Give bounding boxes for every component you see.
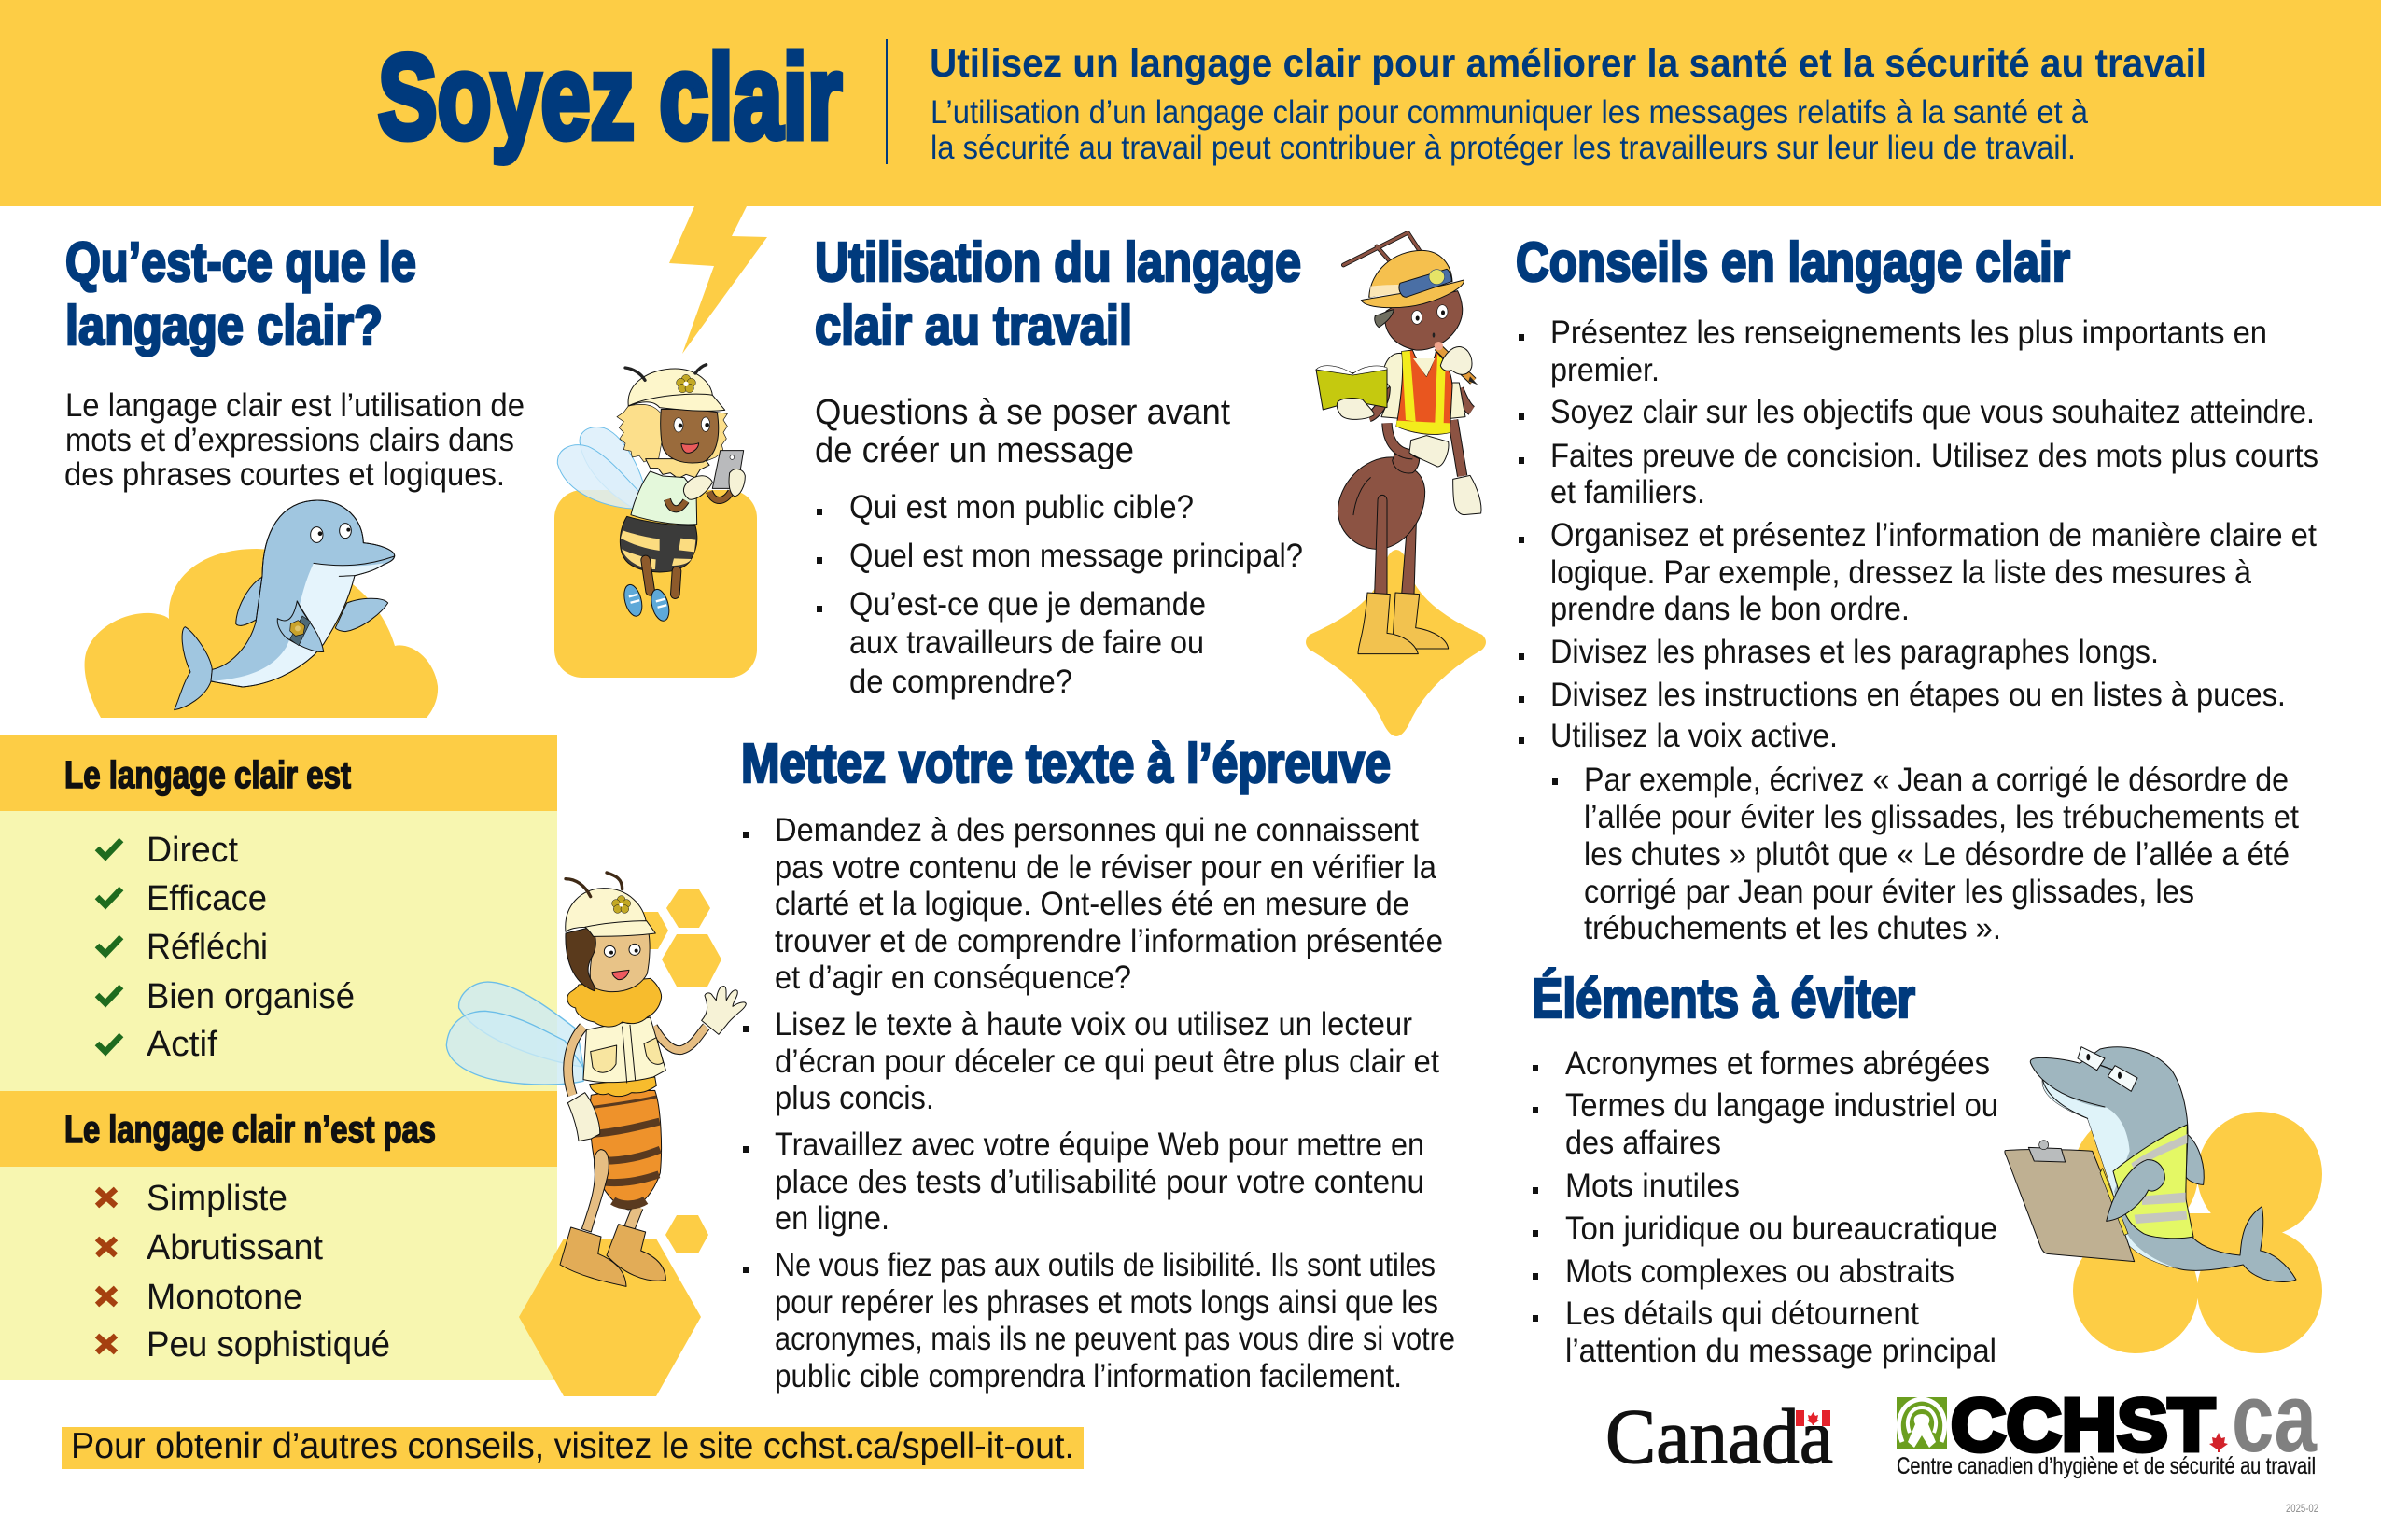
tips bullet list: Soyez clair sur les objectifs que vous souhaitez atteindre.	[1550, 394, 2315, 430]
questions intro	[815, 393, 1230, 470]
tips bullet list: prendre dans le bon ordre.	[1550, 591, 1910, 627]
avoid bullet list	[1533, 1045, 1998, 1369]
definition text: Le langage clair est l’utilisation de	[65, 387, 525, 424]
heading: tips: Conseils en langage clair	[1516, 231, 2070, 293]
avoid bullet list: Ton juridique ou bureaucratique	[1565, 1211, 1997, 1247]
panel: elements to avoid	[1532, 968, 1998, 1369]
testing bullet list: d’écran pour déceler ce qui peut être plus clair et	[775, 1043, 1439, 1080]
banner: plain language is: Le langage clair est	[64, 753, 351, 796]
tips bullet list	[1519, 315, 2318, 946]
logo: CCHST.ca	[1897, 1364, 2318, 1479]
testing bullet list: Ne vous fiez pas aux outils de lisibilité. Ils sont utiles	[775, 1247, 1436, 1283]
banner: plain language is not	[0, 1091, 557, 1167]
testing bullet list: pas votre contenu de le réviser pour en vérifier la	[775, 849, 1436, 886]
tips bullet list: trébuchements et les chutes ».	[1584, 910, 2001, 946]
avoid bullet list: Mots complexes ou abstraits	[1565, 1253, 1954, 1290]
tips bullet list: Divisez les instructions en étapes ou en listes à puces.	[1550, 677, 2286, 713]
header description: la sécurité au travail peut contribuer à protéger les travailleurs sur leur lieu de travail.	[931, 130, 2076, 166]
testing bullet list: Lisez le texte à haute voix ou utilisez un lecteur	[775, 1006, 1412, 1043]
yellow cloud	[85, 549, 438, 718]
avoid bullet list: Termes du langage industriel ou	[1565, 1087, 1998, 1124]
header description: L’utilisation d’un langage clair pour communiquer les messages relatifs à la santé et à	[931, 94, 2088, 131]
list: negative qualities	[0, 1167, 557, 1380]
yellow star	[1306, 550, 1486, 736]
panel: plain language is / is not	[0, 735, 557, 1380]
header banner	[0, 0, 2381, 206]
panel: what is plain language	[64, 231, 525, 493]
testing bullet list: pour repérer les phrases et mots longs ainsi que les	[775, 1284, 1438, 1321]
date code: 2025-02	[2286, 1502, 2318, 1515]
banner: plain language is not: Le langage clair n’est pas	[64, 1108, 436, 1151]
testing bullet list: et d’agir en conséquence?	[775, 959, 1131, 996]
question bullet list: Quel est mon message principal?	[849, 538, 1303, 574]
testing bullet list	[743, 812, 1455, 1394]
avoid bullet list: Les détails qui détournent	[1565, 1295, 1919, 1332]
testing bullet list: Demandez à des personnes qui ne connaissent	[775, 812, 1419, 848]
heading: what is plain language: Qu’est-ce que le	[65, 231, 416, 293]
logo: Canada wordmark: Canada	[1605, 1393, 1833, 1480]
panel: plain language tips	[1516, 231, 2318, 946]
tips bullet list: Divisez les phrases et les paragraphes longs.	[1550, 634, 2159, 670]
tips bullet list: Par exemple, écrivez « Jean a corrigé le désordre de	[1584, 762, 2289, 798]
tips bullet list: et familiers.	[1550, 474, 1705, 511]
testing bullet list: plus concis.	[775, 1080, 934, 1116]
callout: more tips link: Pour obtenir d’autres conseils, visitez le site cchst.ca/spell-it-out.	[71, 1426, 1074, 1466]
definition text	[64, 387, 525, 493]
question bullet list: Qui est mon public cible?	[849, 489, 1194, 525]
testing bullet list: trouver et de comprendre l’information présentée	[775, 923, 1443, 959]
header subtitle: Utilisez un langage clair pour améliorer la santé et la sécurité au travail	[930, 41, 2206, 86]
testing bullet list: place des tests d’utilisabilité pour votre contenu	[775, 1164, 1424, 1200]
heading: workplace use: clair au travail	[815, 295, 1132, 357]
list: positive qualities: Réfléchi	[147, 928, 268, 967]
avoid bullet list: Mots inutiles	[1565, 1168, 1740, 1204]
yellow clover	[2073, 1112, 2322, 1353]
yellow rounded box	[554, 490, 757, 678]
title: Soyez clair	[378, 31, 842, 164]
tips bullet list: les chutes » plutôt que « Le désordre de l’allée a été	[1584, 836, 2290, 873]
list: positive qualities: Efficace	[147, 879, 267, 918]
heading: workplace use	[815, 231, 1301, 357]
banner: plain language is	[0, 735, 557, 811]
tips bullet list: Utilisez la voix active.	[1550, 718, 1838, 754]
list: negative qualities: Monotone	[147, 1278, 302, 1317]
testing bullet list: Travaillez avec votre équipe Web pour mettre en	[775, 1127, 1424, 1163]
tips bullet list: Présentez les renseignements les plus importants en	[1550, 315, 2267, 351]
illustration: bee waving on hexagons	[446, 873, 746, 1396]
heading: test your text: Mettez votre texte à l’épreuve	[741, 733, 1391, 794]
yellow hexagons	[519, 889, 721, 1396]
testing bullet list: clarté et la logique. Ont-elles été en mesure de	[775, 886, 1409, 922]
list: negative qualities: Abrutissant	[147, 1228, 323, 1267]
illustration: ant worker with book on yellow star	[1306, 232, 1486, 736]
list: positive qualities	[0, 811, 557, 1091]
logo: CCHST.ca: ca	[2232, 1364, 2318, 1473]
header description	[931, 94, 2088, 166]
heading: workplace use: Utilisation du langage	[815, 231, 1301, 293]
heading: what is plain language	[65, 231, 416, 357]
question bullet list	[817, 489, 1303, 700]
testing bullet list: en ligne.	[775, 1200, 889, 1237]
questions intro: de créer un message	[815, 431, 1134, 470]
list: positive qualities: Bien organisé	[147, 977, 355, 1016]
list: positive qualities: Direct	[147, 831, 238, 870]
header divider	[886, 39, 888, 164]
question bullet list: Qu’est-ce que je demande	[849, 586, 1206, 623]
tips bullet list: Faites preuve de concision. Utilisez des mots plus courts	[1550, 438, 2318, 474]
avoid bullet list: l’attention du message principal	[1565, 1333, 1996, 1369]
definition text: mots et d’expressions clairs dans	[65, 422, 514, 458]
panel: use of plain language at work	[815, 231, 1303, 700]
icon: lightning bolt	[669, 206, 767, 354]
illustration: dolphin on yellow cloud	[85, 500, 438, 718]
avoid bullet list: Acronymes et formes abrégées	[1565, 1045, 1990, 1082]
avoid bullet list: des affaires	[1565, 1125, 1721, 1161]
tips bullet list: corrigé par Jean pour éviter les glissades, les	[1584, 874, 2194, 910]
illustration: dolphin with clipboard on yellow clover	[2005, 1047, 2322, 1353]
tips bullet list: l’allée pour éviter les glissades, les trébuchements et	[1584, 799, 2299, 835]
list: negative qualities: Peu sophistiqué	[147, 1325, 390, 1365]
questions intro: Questions à se poser avant	[815, 393, 1230, 432]
heading: avoid: Éléments à éviter	[1532, 968, 1915, 1029]
list: positive qualities: Actif	[147, 1025, 217, 1064]
tips bullet list: premier.	[1550, 352, 1660, 388]
tips bullet list: logique. Par exemple, dressez la liste des mesures à	[1550, 554, 2251, 591]
list: negative qualities: Simpliste	[147, 1179, 287, 1218]
question bullet list: aux travailleurs de faire ou	[849, 624, 1204, 661]
testing bullet list: public cible comprendra l’information facilement.	[775, 1358, 1402, 1394]
tips bullet list: Organisez et présentez l’information de manière claire et	[1550, 517, 2317, 553]
panel: test your text	[741, 733, 1455, 1394]
logo: CCHST.ca: CCHST	[1951, 1383, 2215, 1466]
illustration: bee with phone on yellow box	[554, 365, 757, 678]
definition text: des phrases courtes et logiques.	[64, 456, 505, 493]
testing bullet list: acronymes, mais ils ne peuvent pas vous dire si votre	[775, 1321, 1455, 1357]
heading: what is plain language: langage clair?	[65, 295, 383, 357]
question bullet list: de comprendre?	[849, 664, 1072, 700]
